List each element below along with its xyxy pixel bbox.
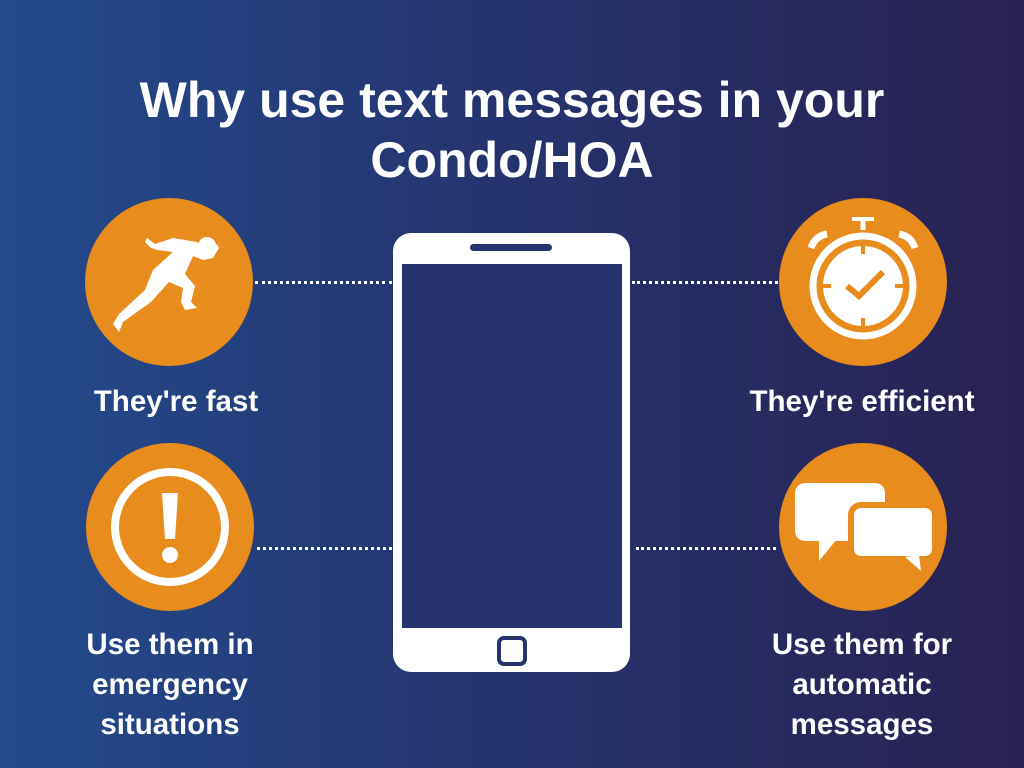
label: emergency: situations [100, 708, 240, 741]
label: efficient: They're efficient [749, 385, 975, 418]
label: emergency [86, 628, 254, 741]
phone [393, 233, 630, 672]
icon: runner [85, 198, 253, 366]
label: automatic: messages [791, 708, 933, 741]
title: Condo/HOA [370, 132, 654, 188]
title: Why use text messages in your [140, 72, 884, 128]
phone home button [497, 636, 527, 666]
icon: stopwatch [779, 198, 947, 366]
title [140, 72, 884, 188]
phone speaker [470, 244, 552, 251]
label: automatic: automatic [792, 668, 932, 701]
label: automatic: Use them for [772, 628, 952, 661]
connector: emergency [257, 547, 392, 550]
icon: exclamation [86, 443, 254, 611]
phone screen [402, 264, 622, 628]
label: emergency: Use them in [86, 628, 254, 661]
icon: chat bubbles [779, 443, 947, 611]
connector: fast [255, 281, 392, 284]
label: automatic [772, 628, 952, 741]
connector: automatic [636, 547, 776, 550]
connector: efficient [632, 281, 778, 284]
label: emergency: emergency [92, 668, 248, 701]
label: fast: They're fast [94, 385, 258, 418]
